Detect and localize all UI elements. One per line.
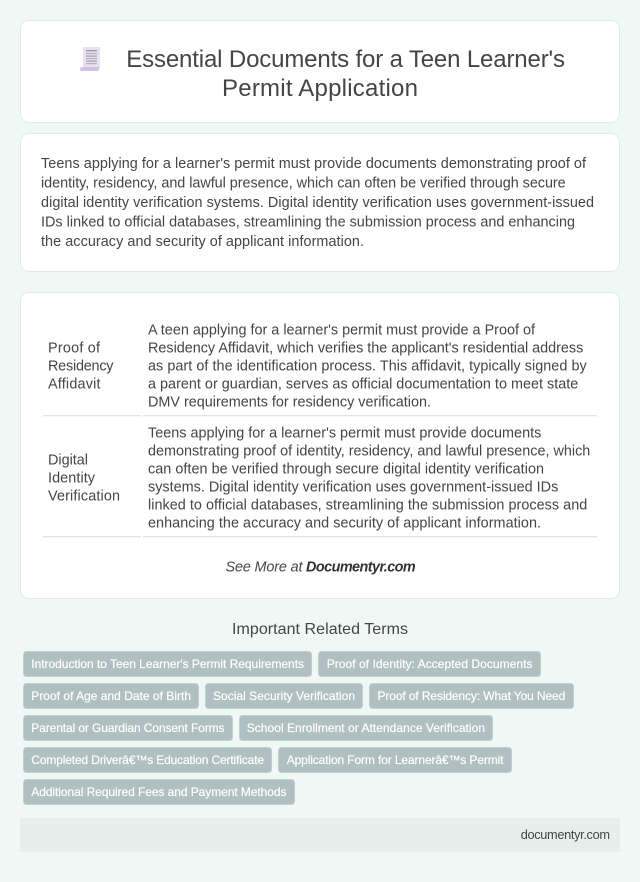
panel: document table — [20, 292, 620, 598]
see more link: Documentyr.com — [306, 560, 416, 576]
intro text: identity, residency, and lawful presence, which can often be verified through secure — [41, 176, 566, 192]
footer bar: documentyr.com — [521, 827, 610, 842]
icon: document scroll — [80, 47, 100, 71]
title: Essential Documents for a Teen Learner's — [126, 46, 565, 73]
panel: introduction — [20, 134, 620, 272]
intro text: the accuracy and security of applicant information. — [41, 234, 364, 250]
row text: Digital Identity Verification: linked to official databases, streamlining the submission process and — [148, 497, 587, 513]
row text: Digital Identity Verification: can often be verified through secure digital identity verification — [148, 461, 544, 477]
related terms tags: School Enrollment or Attendance Verification — [247, 721, 485, 735]
related terms tags: Social Security Verification — [213, 689, 355, 703]
see more link: See More at — [226, 560, 304, 576]
related terms tags: Introduction to Teen Learner's Permit Requirements — [31, 657, 304, 671]
row text: Digital Identity Verification — [148, 425, 590, 531]
row text: Proof of Residency Affidavit: Residency Affidavit, which verifies the applicant's residential address — [148, 340, 583, 356]
related terms tags: Application Form for Learnerâ€™s Permit — [287, 753, 504, 767]
related terms tags — [24, 652, 574, 804]
related terms tags: Additional Required Fees and Payment Methods — [31, 785, 286, 799]
heading: related terms: Important Related Terms — [232, 621, 408, 638]
related terms tags: Proof of Identity: Accepted Documents — [327, 657, 532, 671]
title: Permit Application — [222, 75, 418, 102]
related terms tags: Proof of Age and Date of Birth — [31, 689, 191, 703]
row label: Proof of Residency Affidavit: Residency — [48, 358, 114, 374]
row text: Proof of Residency Affidavit: DMV requirements for residency verification. — [148, 394, 431, 410]
row text: Proof of Residency Affidavit: A teen applying for a learner's permit must provide a Proof of — [148, 322, 536, 338]
intro text: digital identity verification systems. Digital identity verification uses government-issued — [41, 195, 594, 211]
row text: Proof of Residency Affidavit: a parent or guardian, serves as official documentation to meet state — [148, 376, 578, 392]
see more link — [226, 560, 416, 576]
intro text — [41, 156, 594, 250]
panel: header — [20, 20, 620, 122]
row label: Digital Identity Verification — [48, 452, 120, 504]
footer bar — [20, 818, 620, 852]
row text: Digital Identity Verification: Teens applying for a learner's permit must provide documents — [148, 425, 541, 441]
row text: Proof of Residency Affidavit — [148, 322, 587, 410]
row label: Digital Identity Verification: Verification — [48, 488, 120, 504]
row text: Proof of Residency Affidavit: as part of the identification process. This affidavit, typically signed by — [148, 358, 587, 374]
row label: Proof of Residency Affidavit — [48, 340, 114, 392]
intro text: IDs linked to official databases, streamlining the submission process and enhancing — [41, 214, 575, 230]
row text: Digital Identity Verification: enhancing the accuracy and security of applicant information. — [148, 515, 541, 531]
related terms tags: Parental or Guardian Consent Forms — [31, 721, 224, 735]
row text: Digital Identity Verification: systems. Digital identity verification uses government-issued IDs — [148, 479, 558, 495]
row label: Digital Identity Verification: Identity — [48, 470, 96, 486]
row label: Digital Identity Verification: Digital — [48, 452, 88, 468]
row text: Digital Identity Verification: demonstrating proof of identity, residency, and lawful presence, which — [148, 443, 590, 459]
row label: Proof of Residency Affidavit: Proof of — [48, 340, 101, 356]
related terms tags: Proof of Residency: What You Need — [378, 689, 565, 703]
title — [126, 46, 565, 102]
intro text: Teens applying for a learner's permit must provide documents demonstrating proof of — [41, 156, 587, 172]
row label: Proof of Residency Affidavit: Affidavit — [48, 376, 100, 392]
related terms tags: Completed Driverâ€™s Education Certificate — [31, 753, 264, 767]
